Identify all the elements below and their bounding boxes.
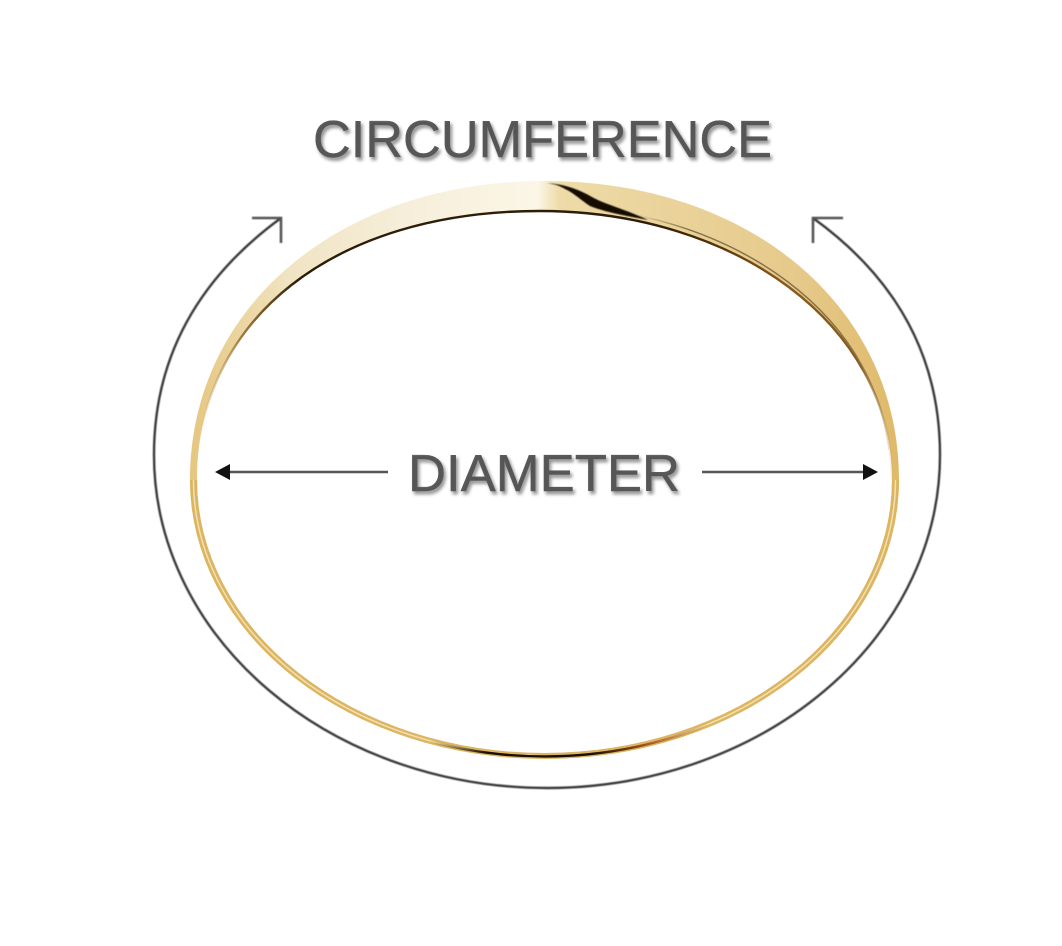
ring band — [190, 181, 899, 759]
diameter arrow: left — [215, 464, 388, 480]
ring right olive line — [642, 216, 890, 450]
circumference arrow — [154, 218, 940, 788]
ring inner edge — [197, 211, 892, 480]
ring lower band tone — [190, 480, 899, 759]
right open arrowhead — [813, 218, 843, 243]
ring black fold — [546, 183, 648, 220]
circumference and diameter diagram — [152, 120, 942, 790]
ring lower highlight — [194, 480, 896, 756]
left open arrowhead — [252, 218, 281, 243]
ring bottom dark edge — [432, 724, 706, 758]
label: diameter: DIAMETER — [408, 445, 680, 503]
curved track — [154, 218, 940, 788]
title: circumference: CIRCUMFERENCE — [313, 111, 772, 169]
gold bangle ring — [190, 181, 899, 759]
diameter arrow: right — [702, 464, 878, 480]
